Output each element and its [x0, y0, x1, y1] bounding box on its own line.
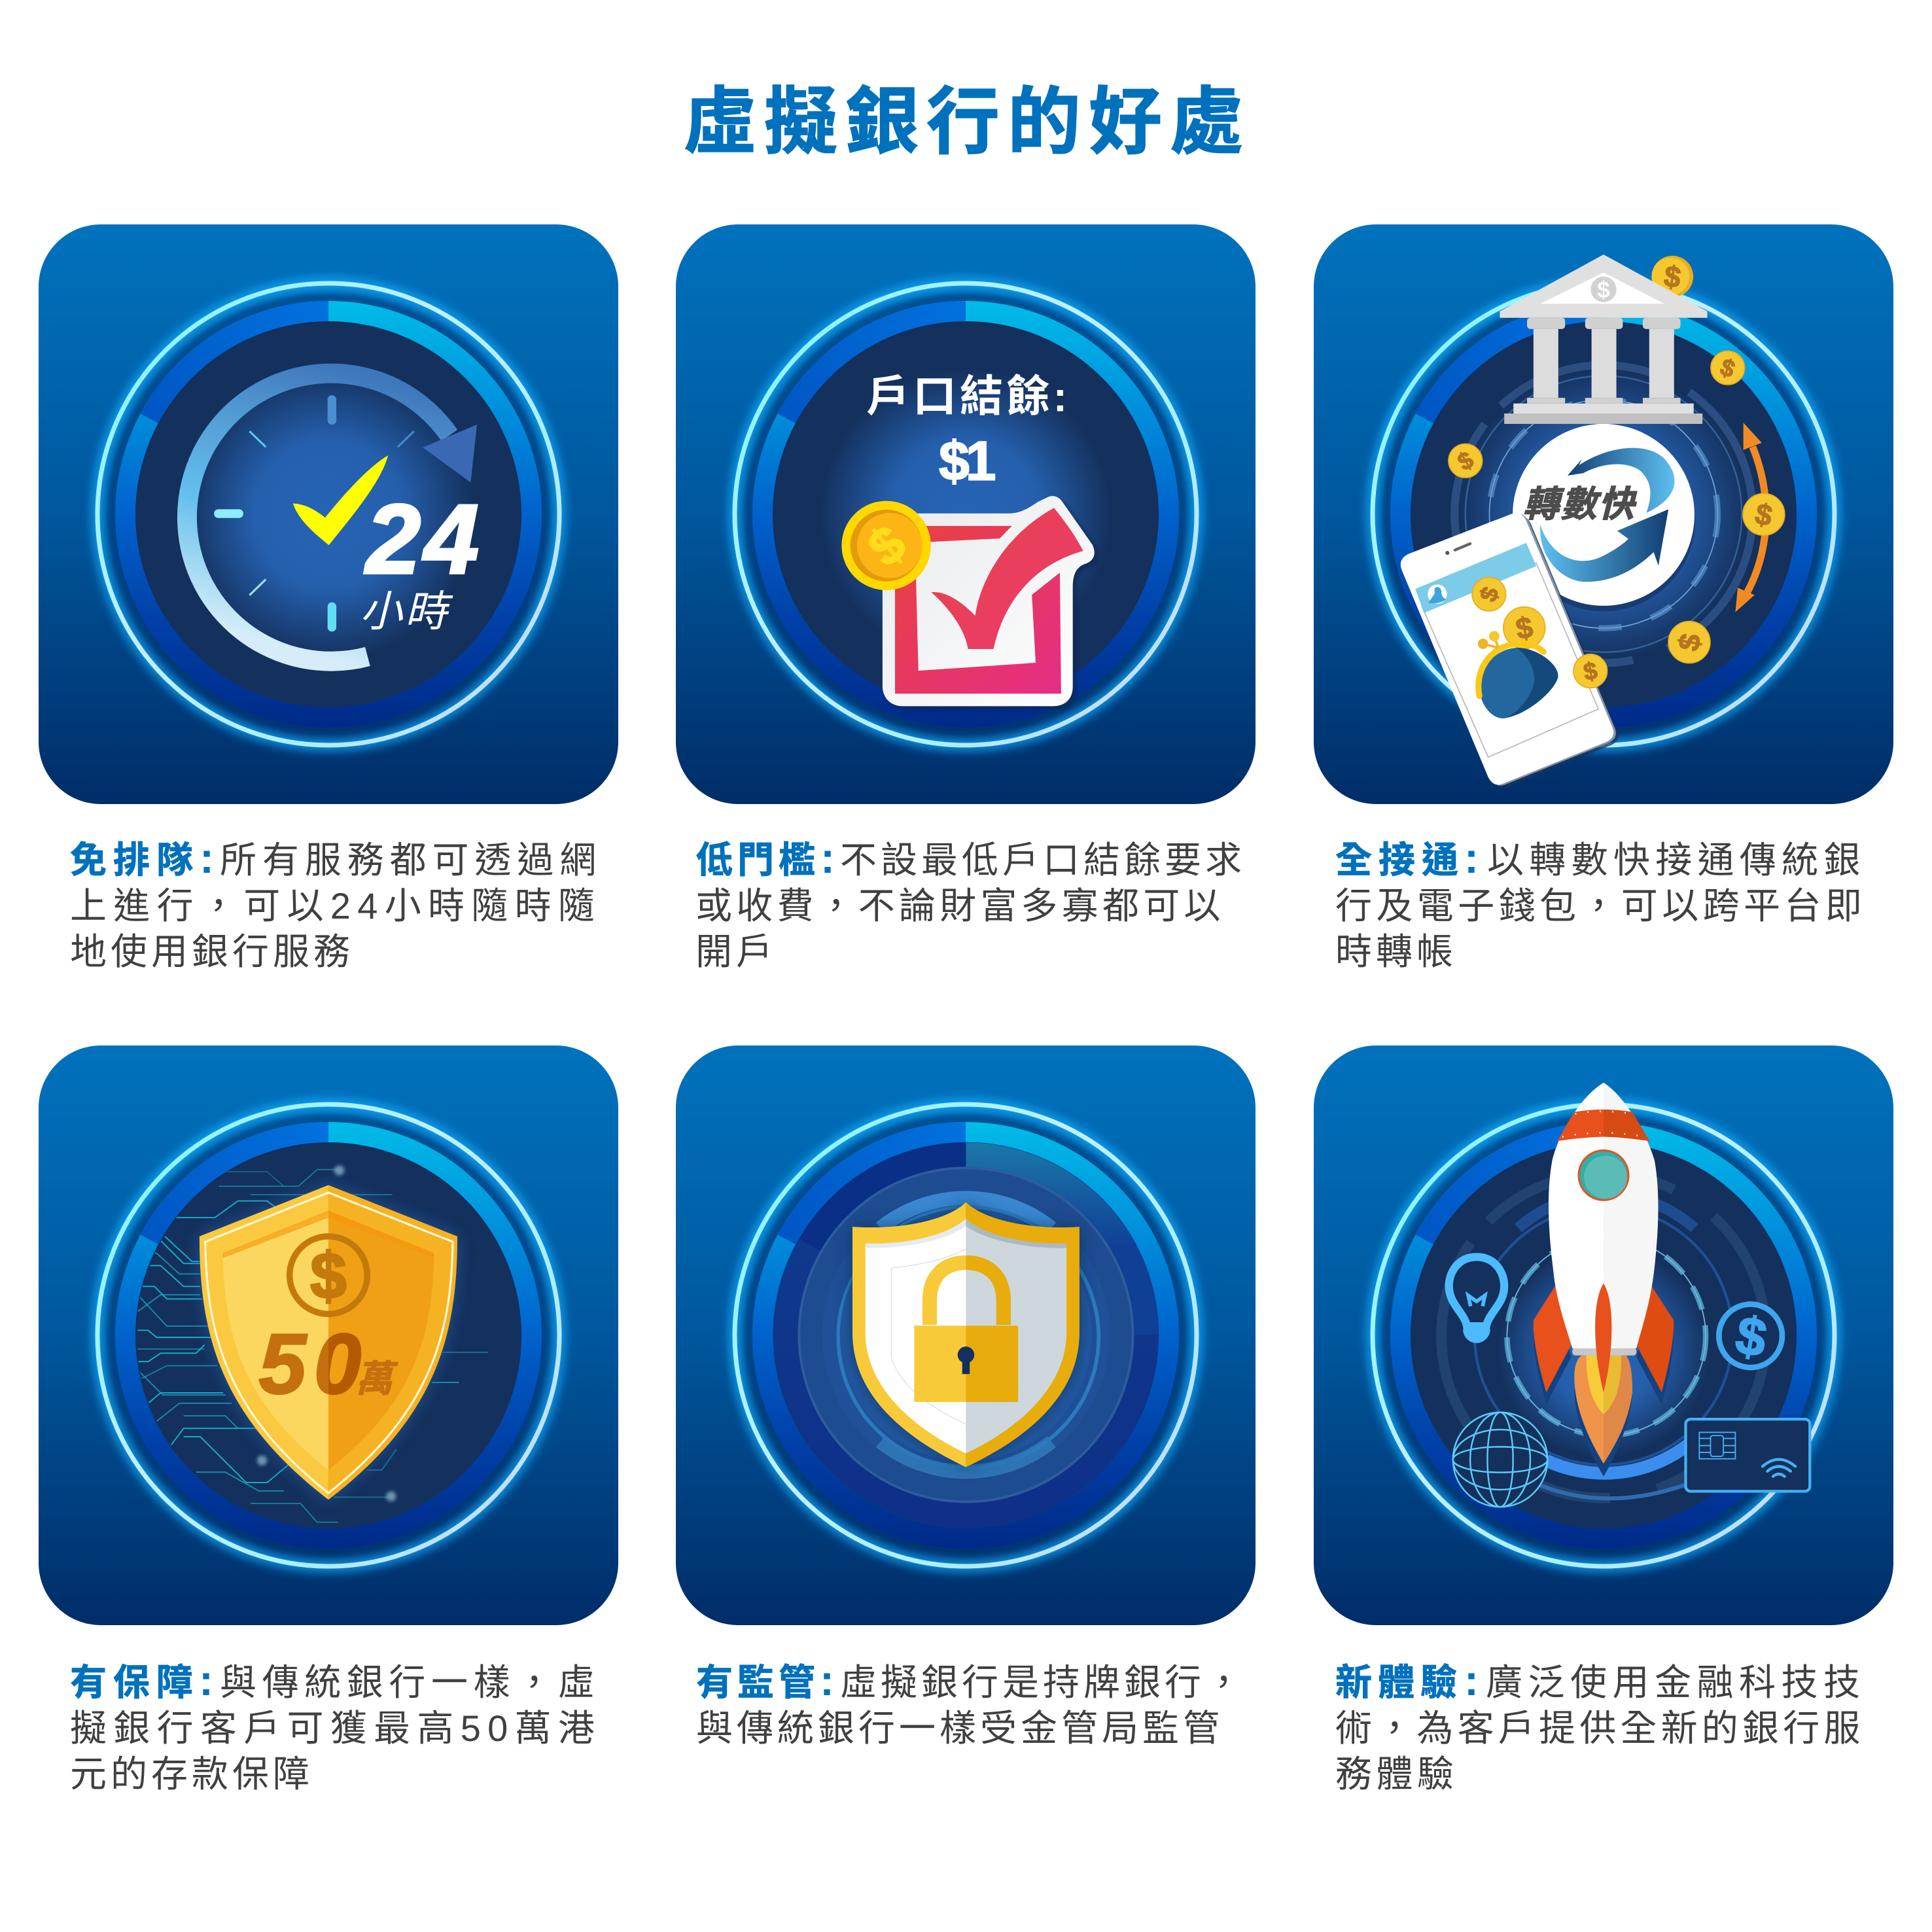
icon: rocket with bulb, dollar, globe and card [1441, 1083, 1810, 1507]
text block: regulation [696, 1656, 1246, 1749]
text block: protection: 元的存款保障 [70, 1753, 313, 1795]
text block: regulation: 有監管 [696, 1662, 820, 1703]
text block: low threshold: : [820, 834, 835, 882]
text block: new experience: 新體驗 [1335, 1662, 1463, 1703]
icon: balance label, coin and checkbox [841, 372, 1098, 709]
text block: regulation: : [820, 1656, 834, 1704]
icon: balance label, coin and checkbox: $ [857, 514, 917, 578]
text block: low threshold: 開戶 [695, 931, 777, 972]
icon: bank, FPS, wallet phone and coins: $ [1513, 610, 1536, 646]
icon: rocket with bulb, dollar, globe and card: $ [1731, 1305, 1771, 1369]
panel: new experience [1314, 1045, 1893, 1625]
text block: protection: 有保障 [70, 1662, 200, 1703]
icon: shield with padlock [773, 1142, 1159, 1528]
text block: no queue: 免排隊 [70, 839, 200, 881]
title: 虛擬銀行的好處 [683, 81, 1251, 163]
icon: bank, FPS, wallet phone and coins [1401, 255, 1785, 788]
text block: no queue: 地使用銀行服務 [70, 931, 354, 972]
text block: protection: 擬銀行客戶可獲最高50萬港 [70, 1708, 601, 1749]
panel: 24 hour clock [39, 224, 618, 804]
text block: no queue: : [200, 834, 214, 882]
text block: low threshold: 不設最低戶口結餘要求 [840, 839, 1246, 881]
panel: interbank connection [1314, 224, 1893, 804]
text block: regulation: 與傳統銀行一樣受金管局監管 [696, 1708, 1223, 1749]
icon: bank, FPS, wallet phone and coins: $ [1581, 657, 1599, 686]
icon: balance label, coin and checkbox: $1 [939, 430, 996, 492]
text block: full connection: 時轉帳 [1335, 931, 1457, 972]
icon: bank, FPS, wallet phone and coins: $ [1662, 259, 1683, 294]
text block: protection: 與傳統銀行一樣，虛 [220, 1662, 600, 1703]
icon: bank, FPS, wallet phone and coins: $ [1717, 353, 1738, 383]
icon: clock with 24 hours [187, 374, 482, 661]
icon: clock with 24 hours: 24 [364, 484, 482, 594]
text block: low threshold: 低門檻 [696, 839, 820, 881]
text block: no queue: 上進行，可以24小時隨時隨 [70, 885, 601, 926]
icon: balance label, coin and checkbox: 戶口結餘: [866, 372, 1070, 421]
text block: full connection: 行及電子錢包，可以跨平台即 [1335, 885, 1866, 926]
text block: new experience: 術，為客戶提供全新的銀行服 [1335, 1708, 1865, 1749]
icon: bank, FPS, wallet phone and coins: $ [1752, 497, 1775, 533]
text block: protection: : [199, 1656, 213, 1704]
panel: account balance [676, 224, 1256, 804]
text block: no queue: 所有服務都可透過網 [220, 839, 602, 881]
icon: gold shield with 50萬: 50 [258, 1316, 369, 1412]
text block: no queue [70, 834, 602, 972]
icon: gold shield with 50萬: 萬 [356, 1358, 398, 1399]
icon: gold shield with 50萬: $ [310, 1240, 347, 1312]
icon: bank, FPS, wallet phone and coins: 轉數快 [1523, 483, 1638, 524]
text block: new experience: : [1464, 1656, 1479, 1704]
text block: full connection [1335, 834, 1866, 972]
icon: bank, FPS, wallet phone and coins: $ [1672, 631, 1708, 653]
text block: regulation: 虛擬銀行是持牌銀行， [840, 1662, 1246, 1703]
panel: regulated [676, 1045, 1256, 1625]
icon: bank, FPS, wallet phone and coins: $ [1597, 277, 1610, 303]
text block: full connection: : [1464, 834, 1479, 882]
text block: new experience: 廣泛使用金融科技技 [1486, 1662, 1866, 1703]
icon: bank, FPS, wallet phone and coins: $ [1453, 446, 1478, 476]
text block: full connection: 以轉數快接通傳統銀 [1487, 839, 1866, 881]
panel: deposit protection [39, 1045, 618, 1625]
text block: protection [70, 1656, 601, 1795]
text block: new experience [1335, 1656, 1866, 1795]
text block: low threshold: 或收費，不論財富多寡都可以 [695, 885, 1225, 926]
text block: new experience: 務體驗 [1335, 1753, 1458, 1795]
text block: full connection: 全接通 [1335, 839, 1465, 881]
text block: low threshold [695, 834, 1246, 972]
icon: clock with 24 hours: 小時 [360, 588, 453, 635]
icon: bank, FPS, wallet phone and coins: $ [1474, 584, 1504, 605]
icon: gold shield with 50萬 [137, 1165, 488, 1522]
